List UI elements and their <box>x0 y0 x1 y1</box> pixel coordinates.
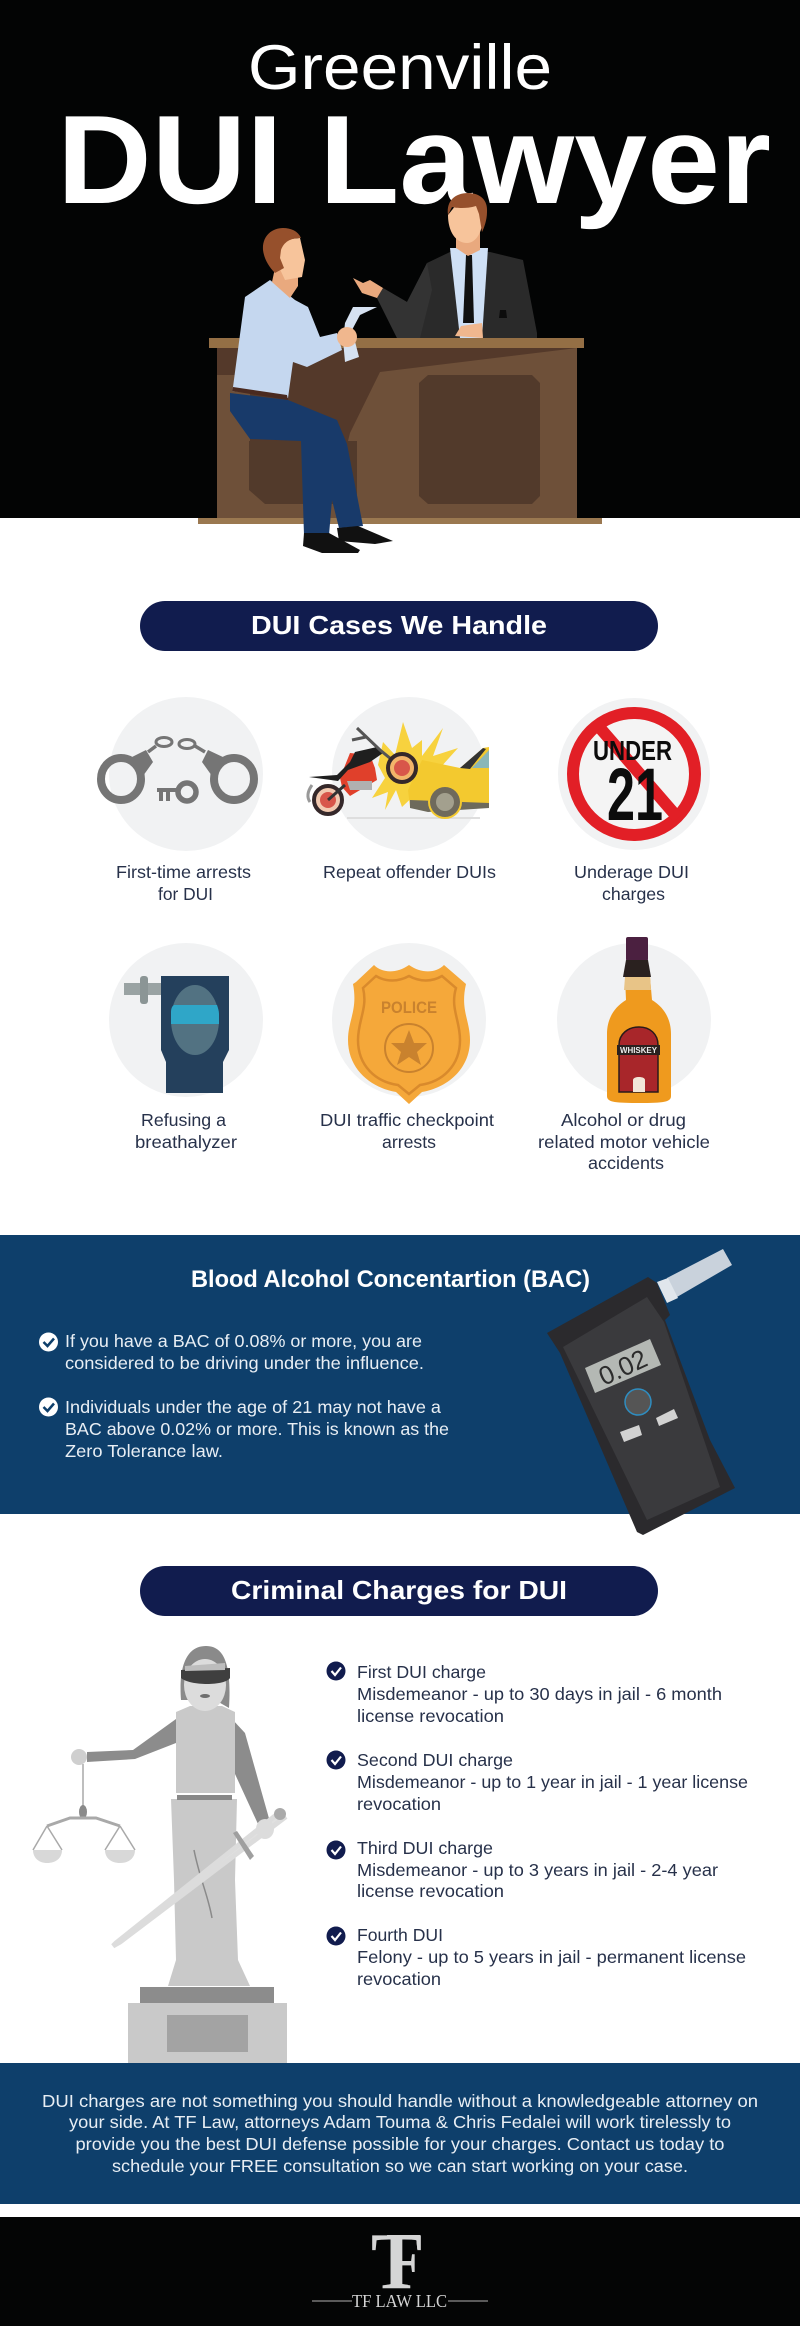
label: accidents <box>588 1153 664 1173</box>
icon: police badge: POLICE <box>381 998 437 1017</box>
charge 4: Felony - up to 5 years in jail - permanent license <box>357 1947 746 1967</box>
label: First-time arrests <box>116 862 251 882</box>
bullet 2 <box>39 1397 449 1461</box>
charge 3: Misdemeanor - up to 3 years in jail - 2-4 year <box>357 1860 718 1880</box>
heading pill: Criminal Charges for DUI: Criminal Charges for DUI <box>231 1575 567 1605</box>
label <box>320 1110 494 1152</box>
logo: TF LAW LLC: TF LAW LLC <box>352 2291 447 2311</box>
footer <box>0 2217 800 2326</box>
label: DUI traffic checkpoint <box>320 1110 494 1130</box>
label: related motor vehicle <box>538 1132 710 1152</box>
charge 2: revocation <box>357 1794 441 1814</box>
illustration: lawyer and client at desk <box>198 193 602 553</box>
label <box>116 862 251 904</box>
charge 3: license revocation <box>357 1881 504 1901</box>
client <box>230 228 393 553</box>
card: refusing breathalyzer <box>109 943 263 1152</box>
bullet 2: Individuals under the age of 21 may not have a <box>65 1397 441 1417</box>
label <box>135 1110 237 1152</box>
panel: closing call to action: your side. At TF Law, attorneys Adam Touma & Chris Fedalei will work tirelessly to <box>69 2112 731 2132</box>
card: first-time arrests <box>101 697 263 904</box>
label: for DUI <box>158 884 213 904</box>
icon: whiskey bottle <box>607 937 671 1103</box>
heading pill: DUI Cases We Handle <box>140 601 658 651</box>
label <box>574 862 689 904</box>
title: DUI Lawyer: DUI Lawyer <box>57 89 771 230</box>
label: Underage DUI <box>574 862 689 882</box>
desk <box>198 338 602 524</box>
icon: police badge <box>348 965 470 1104</box>
heading pill: DUI Cases We Handle: DUI Cases We Handle <box>251 610 547 640</box>
panel: closing call to action: provide you the best DUI defense possible for your charges. Contact us today to <box>76 2134 724 2154</box>
charge 1: license revocation <box>357 1706 504 1726</box>
icon: breathalyzer <box>124 976 229 1093</box>
panel: closing call to action: schedule your FREE consultation so we can start working on your case. <box>112 2156 688 2176</box>
panel: blood alcohol concentration <box>0 1235 800 1514</box>
charge 2: Second DUI charge <box>357 1750 513 1770</box>
charge 3 <box>326 1838 718 1901</box>
bullet 2: Zero Tolerance law. <box>65 1441 223 1461</box>
charge 4 <box>326 1925 746 1989</box>
charge 2 <box>326 1750 748 1814</box>
label: Repeat offender DUIs <box>323 862 496 882</box>
charge 4: revocation <box>357 1969 441 1989</box>
label: arrests <box>382 1132 436 1152</box>
card: underage <box>558 698 710 904</box>
panel heading: Blood Alcohol Concentartion (BAC) <box>191 1266 590 1293</box>
charge 3: Third DUI charge <box>357 1838 493 1858</box>
logo: TF LAW LLC: F <box>386 2218 423 2306</box>
pedestal <box>128 1987 287 2065</box>
hero panel <box>0 0 800 518</box>
panel: closing call to action <box>0 2063 800 2204</box>
bullet 1: considered to be driving under the influence. <box>65 1353 424 1373</box>
heading pill: Criminal Charges for DUI <box>140 1566 658 1616</box>
label: charges <box>602 884 665 904</box>
card: checkpoint <box>320 943 494 1152</box>
icon: under 21 sign <box>573 713 695 836</box>
title: Greenville: Greenville <box>248 33 552 103</box>
icon: under 21 sign: UNDER <box>593 735 672 766</box>
card: repeat offender <box>308 697 496 882</box>
bullet 1 <box>39 1331 424 1373</box>
icon: handcuffs and key <box>101 738 254 801</box>
scales <box>33 1764 135 1863</box>
charge 1 <box>326 1662 722 1726</box>
bullet 2: BAC above 0.02% or more. This is known as the <box>65 1419 449 1439</box>
list: criminal charges <box>326 1662 748 1989</box>
label: Refusing a <box>141 1110 226 1130</box>
icon: handheld breathalyzer device: 0.02 <box>594 1343 652 1391</box>
charge 1: First DUI charge <box>357 1662 486 1682</box>
charge 4: Fourth DUI <box>357 1925 443 1945</box>
logo: TF LAW LLC <box>312 2218 488 2311</box>
label: Alcohol or drug <box>561 1110 686 1130</box>
illustration: lady justice statue <box>33 1646 287 2065</box>
icon: handheld breathalyzer device <box>547 1249 735 1535</box>
label <box>538 1110 710 1173</box>
bullet 1: If you have a BAC of 0.08% or more, you are <box>65 1331 422 1351</box>
charge 2: Misdemeanor - up to 1 year in jail - 1 year license <box>357 1772 748 1792</box>
panel: closing call to action: DUI charges are not something you should handle without a knowledgeable attorney on <box>42 2091 758 2111</box>
icon: motorcycle crash <box>308 722 489 819</box>
charge 1: Misdemeanor - up to 30 days in jail - 6 month <box>357 1684 722 1704</box>
icon: whiskey bottle: WHISKEY <box>620 1046 658 1055</box>
label: breathalyzer <box>135 1132 237 1152</box>
card: alcohol accidents <box>538 937 711 1173</box>
logo: TF LAW LLC: T <box>371 2218 422 2306</box>
lawyer <box>353 193 537 338</box>
icon: under 21 sign: 21 <box>607 753 663 836</box>
